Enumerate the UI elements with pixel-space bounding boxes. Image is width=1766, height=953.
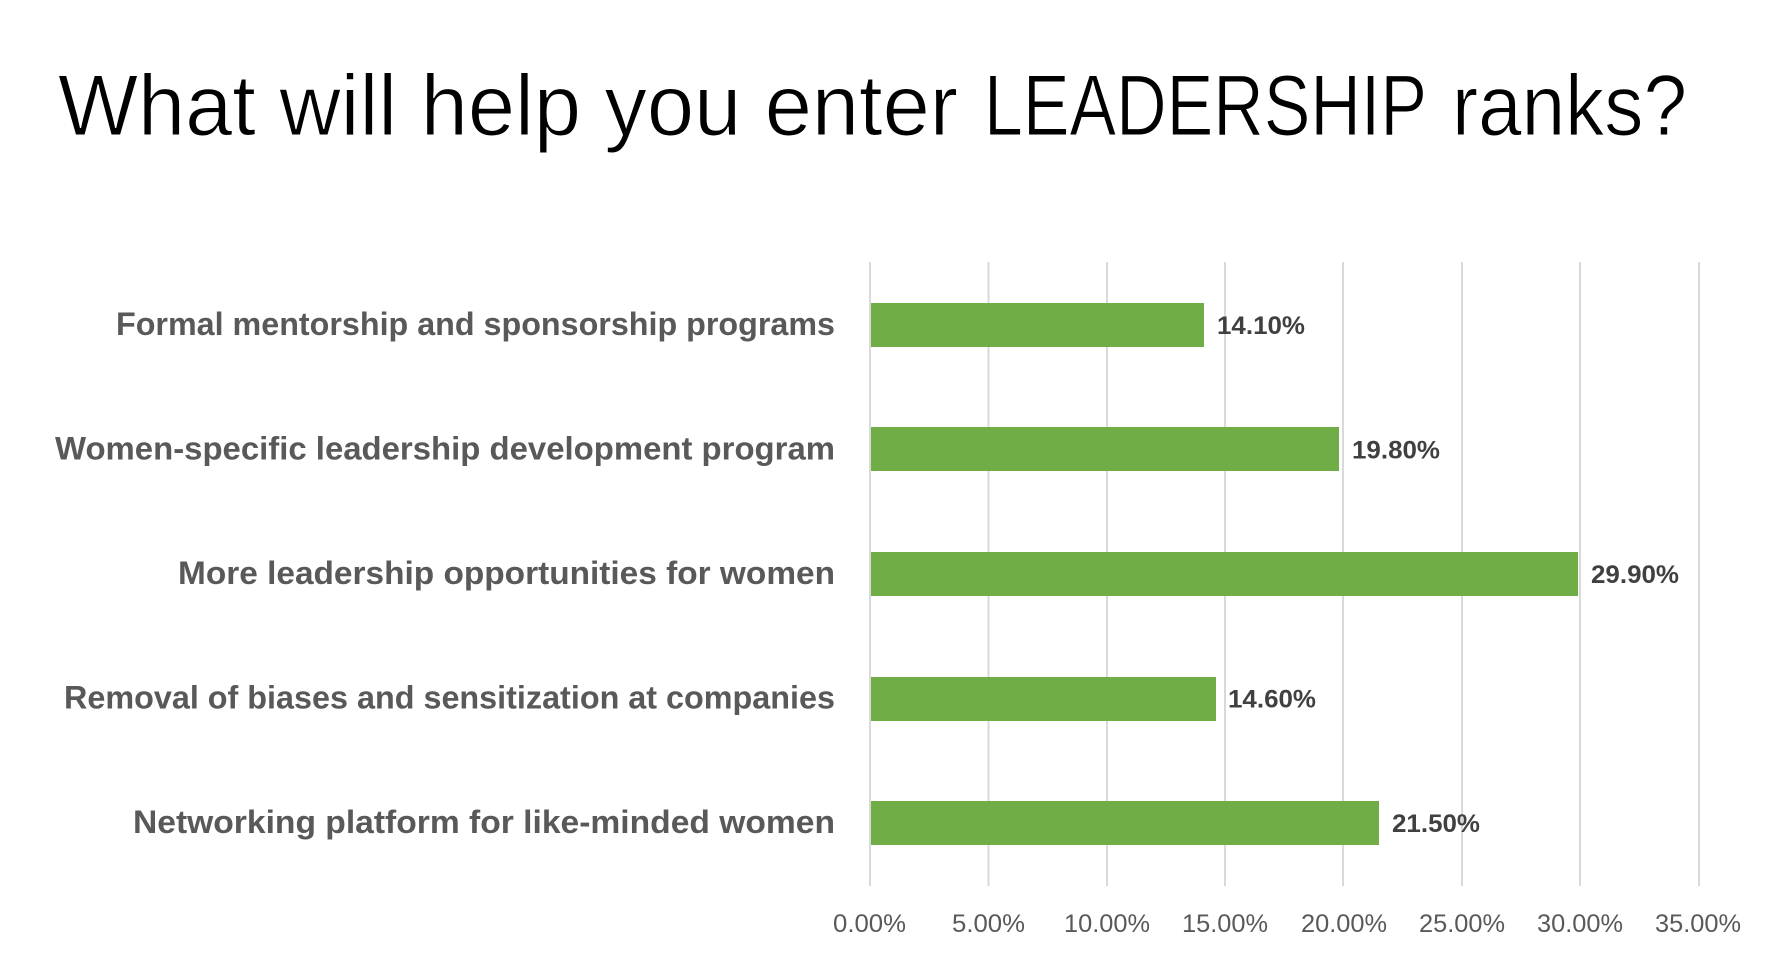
category: Removal of biases and sensitization at companies: 14.60% [1228,686,1316,714]
category: Women-specific leadership development program [55,427,1440,471]
title: What will help you enter [58,58,958,154]
category: Formal mentorship and sponsorship programs: 14.10% [1217,312,1305,340]
category: Women-specific leadership development program: Women-specific leadership development program [55,430,835,466]
bar chart [55,262,1741,938]
x axis labels: 0.00% [833,910,906,938]
category: More leadership opportunities for women: 29.90% [1591,561,1679,589]
x axis labels [833,910,1741,938]
category: Removal of biases and sensitization at companies: Removal of biases and sensitization at companies [64,680,835,716]
x axis labels: 30.00% [1537,910,1623,938]
category: More leadership opportunities for women [178,552,1679,596]
x axis labels: 35.00% [1655,910,1741,938]
category: Networking platform for like-minded women [133,801,1480,845]
category: Networking platform for like-minded women: 21.50% [1392,810,1480,838]
x axis labels: 10.00% [1064,910,1150,938]
x axis labels: 15.00% [1182,910,1268,938]
category: Removal of biases and sensitization at companies [64,677,1316,721]
x axis labels: 20.00% [1301,910,1387,938]
category: Formal mentorship and sponsorship programs [116,303,1305,347]
category: Networking platform for like-minded women: Networking platform for like-minded women [133,804,835,840]
title: LEADERSHIP [984,58,1427,154]
category: Formal mentorship and sponsorship programs: Formal mentorship and sponsorship programs [116,306,835,342]
category: More leadership opportunities for women: More leadership opportunities for women [178,555,835,591]
category: Women-specific leadership development program: 19.80% [1352,436,1440,464]
title: ranks? [1452,58,1687,154]
title [58,58,1687,154]
x axis labels: 25.00% [1419,910,1505,938]
x axis labels: 5.00% [952,910,1025,938]
